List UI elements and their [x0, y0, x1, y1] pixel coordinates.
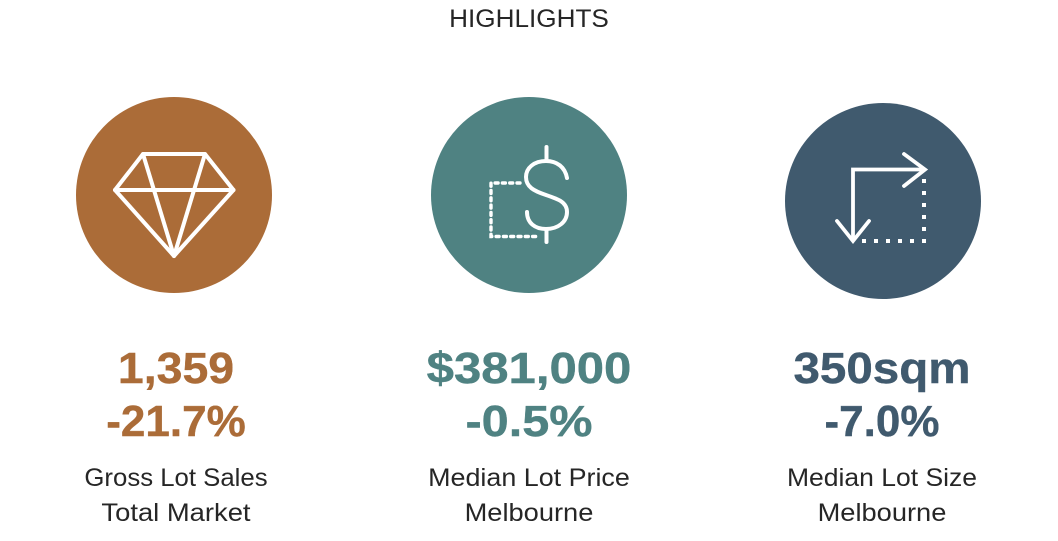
title: HIGHLIGHTS [449, 5, 609, 33]
label: gross lot sales: Gross Lot Sales [84, 464, 268, 492]
label: median lot price: Median Lot Price [428, 464, 630, 492]
stat: gross lot sales [106, 344, 246, 446]
stat: median lot size: -7.0% [825, 397, 939, 446]
stat: median lot size: 350sqm [793, 344, 970, 393]
label: median lot price: Melbourne [465, 499, 593, 527]
stat: median lot price: $381,000 [427, 344, 631, 393]
label: median lot size [787, 464, 977, 527]
label: gross lot sales [84, 464, 268, 527]
label: median lot price [428, 464, 630, 527]
label: median lot size: Median Lot Size [787, 464, 977, 492]
stat: median lot price [427, 344, 631, 446]
stat: gross lot sales: -21.7% [106, 397, 246, 446]
stat: gross lot sales: 1,359 [118, 344, 234, 393]
stat: median lot price: -0.5% [465, 397, 593, 446]
icon: resize arrows in navy circle [785, 103, 981, 299]
icon: diamond in brown circle [76, 97, 272, 293]
label: median lot size: Melbourne [818, 499, 946, 527]
stat: median lot size [793, 344, 970, 446]
label: gross lot sales: Total Market [101, 499, 251, 527]
icon: dollar in teal circle [431, 97, 627, 293]
